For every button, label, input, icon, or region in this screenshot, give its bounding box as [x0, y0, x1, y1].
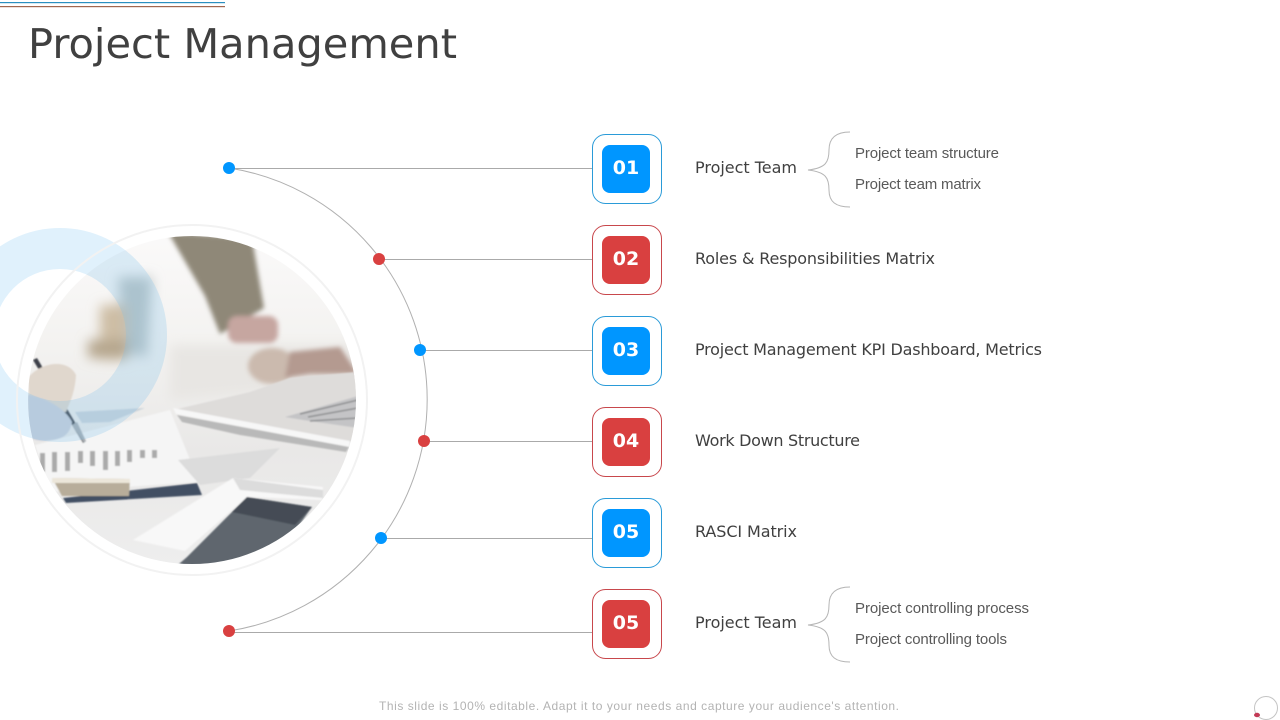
photo ring	[17, 225, 367, 575]
label: RASCI matrix: RASCI Matrix	[695, 522, 797, 541]
sub-items: project controlling: Project controlling process	[855, 600, 1029, 617]
sub-items: project controlling	[855, 600, 1029, 648]
lower desk shade	[178, 448, 280, 485]
badge 05 red: 05	[613, 612, 639, 634]
badge 03	[592, 316, 662, 386]
tablet	[178, 499, 312, 564]
pen	[33, 358, 86, 443]
sub-items: project controlling: Project controlling tools	[855, 631, 1007, 648]
badge 05 blue: 05	[613, 521, 639, 543]
sub-items: project team: Project team matrix	[855, 176, 982, 193]
label: project team: Project Team	[695, 158, 797, 177]
badge 02	[592, 226, 662, 294]
badge 02: 02	[613, 248, 639, 270]
keyboard	[285, 396, 358, 428]
blue ring overlay on photo	[28, 250, 167, 442]
node dots	[223, 162, 430, 637]
bracket: project controlling	[808, 587, 850, 662]
label: project team (controlling): Project Team	[695, 613, 797, 632]
upper faint chart	[75, 408, 145, 423]
icon: corner loader	[1254, 696, 1278, 720]
badge 05 blue	[592, 498, 662, 568]
connector arc	[229, 168, 427, 631]
sub-items: project team	[855, 145, 999, 193]
badge 03: 03	[613, 339, 639, 361]
clipboard	[63, 483, 202, 503]
paper stack	[35, 410, 199, 492]
badge 01: 01	[613, 157, 639, 179]
top accent lines	[0, 2, 225, 7]
photo: desk with laptop and documents	[20, 230, 365, 570]
laptop	[180, 372, 356, 442]
notebook with spiral	[133, 478, 323, 551]
badge 05 red	[592, 590, 662, 658]
bracket: project team	[808, 132, 850, 207]
chart bars on paper	[40, 450, 157, 472]
footer note: This slide is 100% editable. Adapt it to your needs and capture your audience's attention.	[379, 699, 899, 713]
badge 04: 04	[613, 430, 639, 452]
label: KPI dashboard: Project Management KPI Dashboard, Metrics	[695, 340, 1042, 359]
label: roles and responsibilities: Roles & Responsibilities Matrix	[695, 249, 935, 268]
hand with pen	[28, 364, 76, 412]
badge 04	[592, 408, 662, 476]
badge 01	[592, 134, 662, 204]
label: work down structure: Work Down Structure	[695, 431, 860, 450]
sub-items: project team: Project team structure	[855, 145, 999, 162]
title: Project Management	[28, 20, 457, 68]
decorative blue ring behind photo	[0, 228, 125, 438]
connector lines	[229, 168, 592, 632]
